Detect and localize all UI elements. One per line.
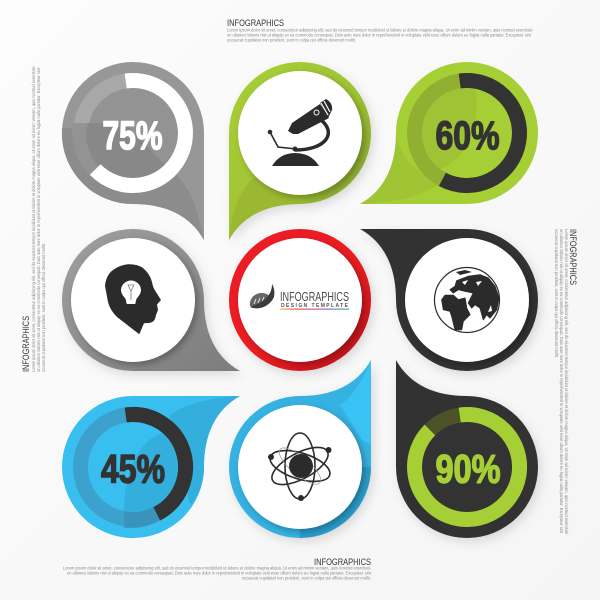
value 60%: 60% [436,114,500,158]
icon: atom [267,433,333,501]
icon: globe [434,268,500,332]
heading block: top: occaecat cupidatat non proident, sunt in culpa qui officia deserunt mollit. [227,38,356,42]
panel: 45% blue gauge [62,396,240,538]
heading block: bottom: occaecat cupidatat non proident, sunt in culpa qui officia deserunt mollit. [242,576,371,580]
heading block: bottom [63,557,372,580]
panel: microscope green [229,62,371,240]
panel: atom blue [229,360,371,538]
panel: head gray [62,229,240,371]
heading block: right, rotated: occaecat cupidatat non proident, sunt in culpa qui officia deserunt mollit. [554,229,559,358]
heading block: left, rotated: occaecat cupidatat non proident, sunt in culpa qui officia deserunt mollit. [41,243,46,372]
heading block: right, rotated: Lorem ipsum dolor sit amet, consectetur adipiscing elit, sed do eiusmod tempor incididunt ut labore et dolore magna aliqua. Ut enim ad minim veniam, quis nostrud exercitati- [564,229,569,535]
heading block: bottom: INFOGRAPHICS [314,557,371,568]
panel: 75% gray gauge [62,62,204,240]
heading block: bottom: Lorem ipsum dolor sit amet, consectetur adipiscing elit, sed do eiusmod tempor incididunt ut labore et dolore magna aliqua. Ut enim ad minim veniam, quis nostrud exercitati- [63,566,371,570]
heading block: left, rotated [21,66,46,372]
heading block: left, rotated: INFOGRAPHICS [21,316,32,372]
heading block: bottom: on ullamco laboris nisi ut aliquip ex ea commodo consequat. Duis aute irure dolor in reprehenderit in voluptate velit esse cillum dolore eu fugiat nulla pariatur. Excepteur sint [67,570,372,576]
white disc [71,238,195,362]
heading block: right, rotated: on ullamco laboris nisi ut aliquip ex ea commodo consequat. Duis aute irure dolor in reprehenderit in voluptate velit esse cillum dolore eu fugiat nulla pariatur. Excepteur sint [559,229,564,534]
logo wordmark: INFOGRAPHICS [280,290,349,304]
heading block: top [227,18,533,42]
white disc [238,405,362,529]
panel: globe dark [360,229,538,371]
white disc [238,71,362,195]
panel: center logo red ring [229,229,371,371]
heading block: top: INFOGRAPHICS [227,18,284,29]
heading block: top: Lorem ipsum dolor sit amet, consectetur adipiscing elit, sed do eiusmod tempor incididunt ut labore et dolore magna aliqua. Ut enim ad minim veniam, quis nostrud exercitati- [227,28,533,32]
heading block: top: on ullamco laboris nisi ut aliquip ex ea commodo consequat. Duis aute irure dolor in reprehenderit in voluptate velit esse cillum dolore eu fugiat nulla pariatur. Excepteur sint [227,32,532,38]
value 90%: 90% [436,448,500,492]
rainbow line [280,309,349,310]
gauge ring 45% [126,414,186,514]
white disc [405,238,529,362]
heading block: left, rotated: Lorem ipsum dolor sit amet, consectetur adipiscing elit, sed do eiusmod tempor incididunt ut labore et dolore magna aliqua. Ut enim ad minim veniam, quis nostrud exercitati- [31,66,36,372]
value 75%: 75% [102,114,162,158]
gauge ring 90% [415,414,520,519]
logo mark [250,284,274,308]
icon: microscope [268,99,332,166]
icon: head with light bulb [105,264,161,334]
gauge ring 60% [442,80,519,185]
heading block: right, rotated [554,229,578,535]
heading block: right, rotated: INFOGRAPHICS [567,229,578,285]
logo subtitle: DESIGN TEMPLATE [281,303,349,309]
value 45%: 45% [101,448,165,492]
heading block: left, rotated: on ullamco laboris nisi ut aliquip ex ea commodo consequat. Duis aute irure dolor in reprehenderit in voluptate velit esse cillum dolore eu fugiat nulla pariatur. Excepteur sint [36,67,41,372]
gauge ring 75% [95,80,185,185]
white disc [238,238,362,362]
panel: 60% green gauge [360,62,538,204]
panel: 90% dark gauge [396,360,538,538]
